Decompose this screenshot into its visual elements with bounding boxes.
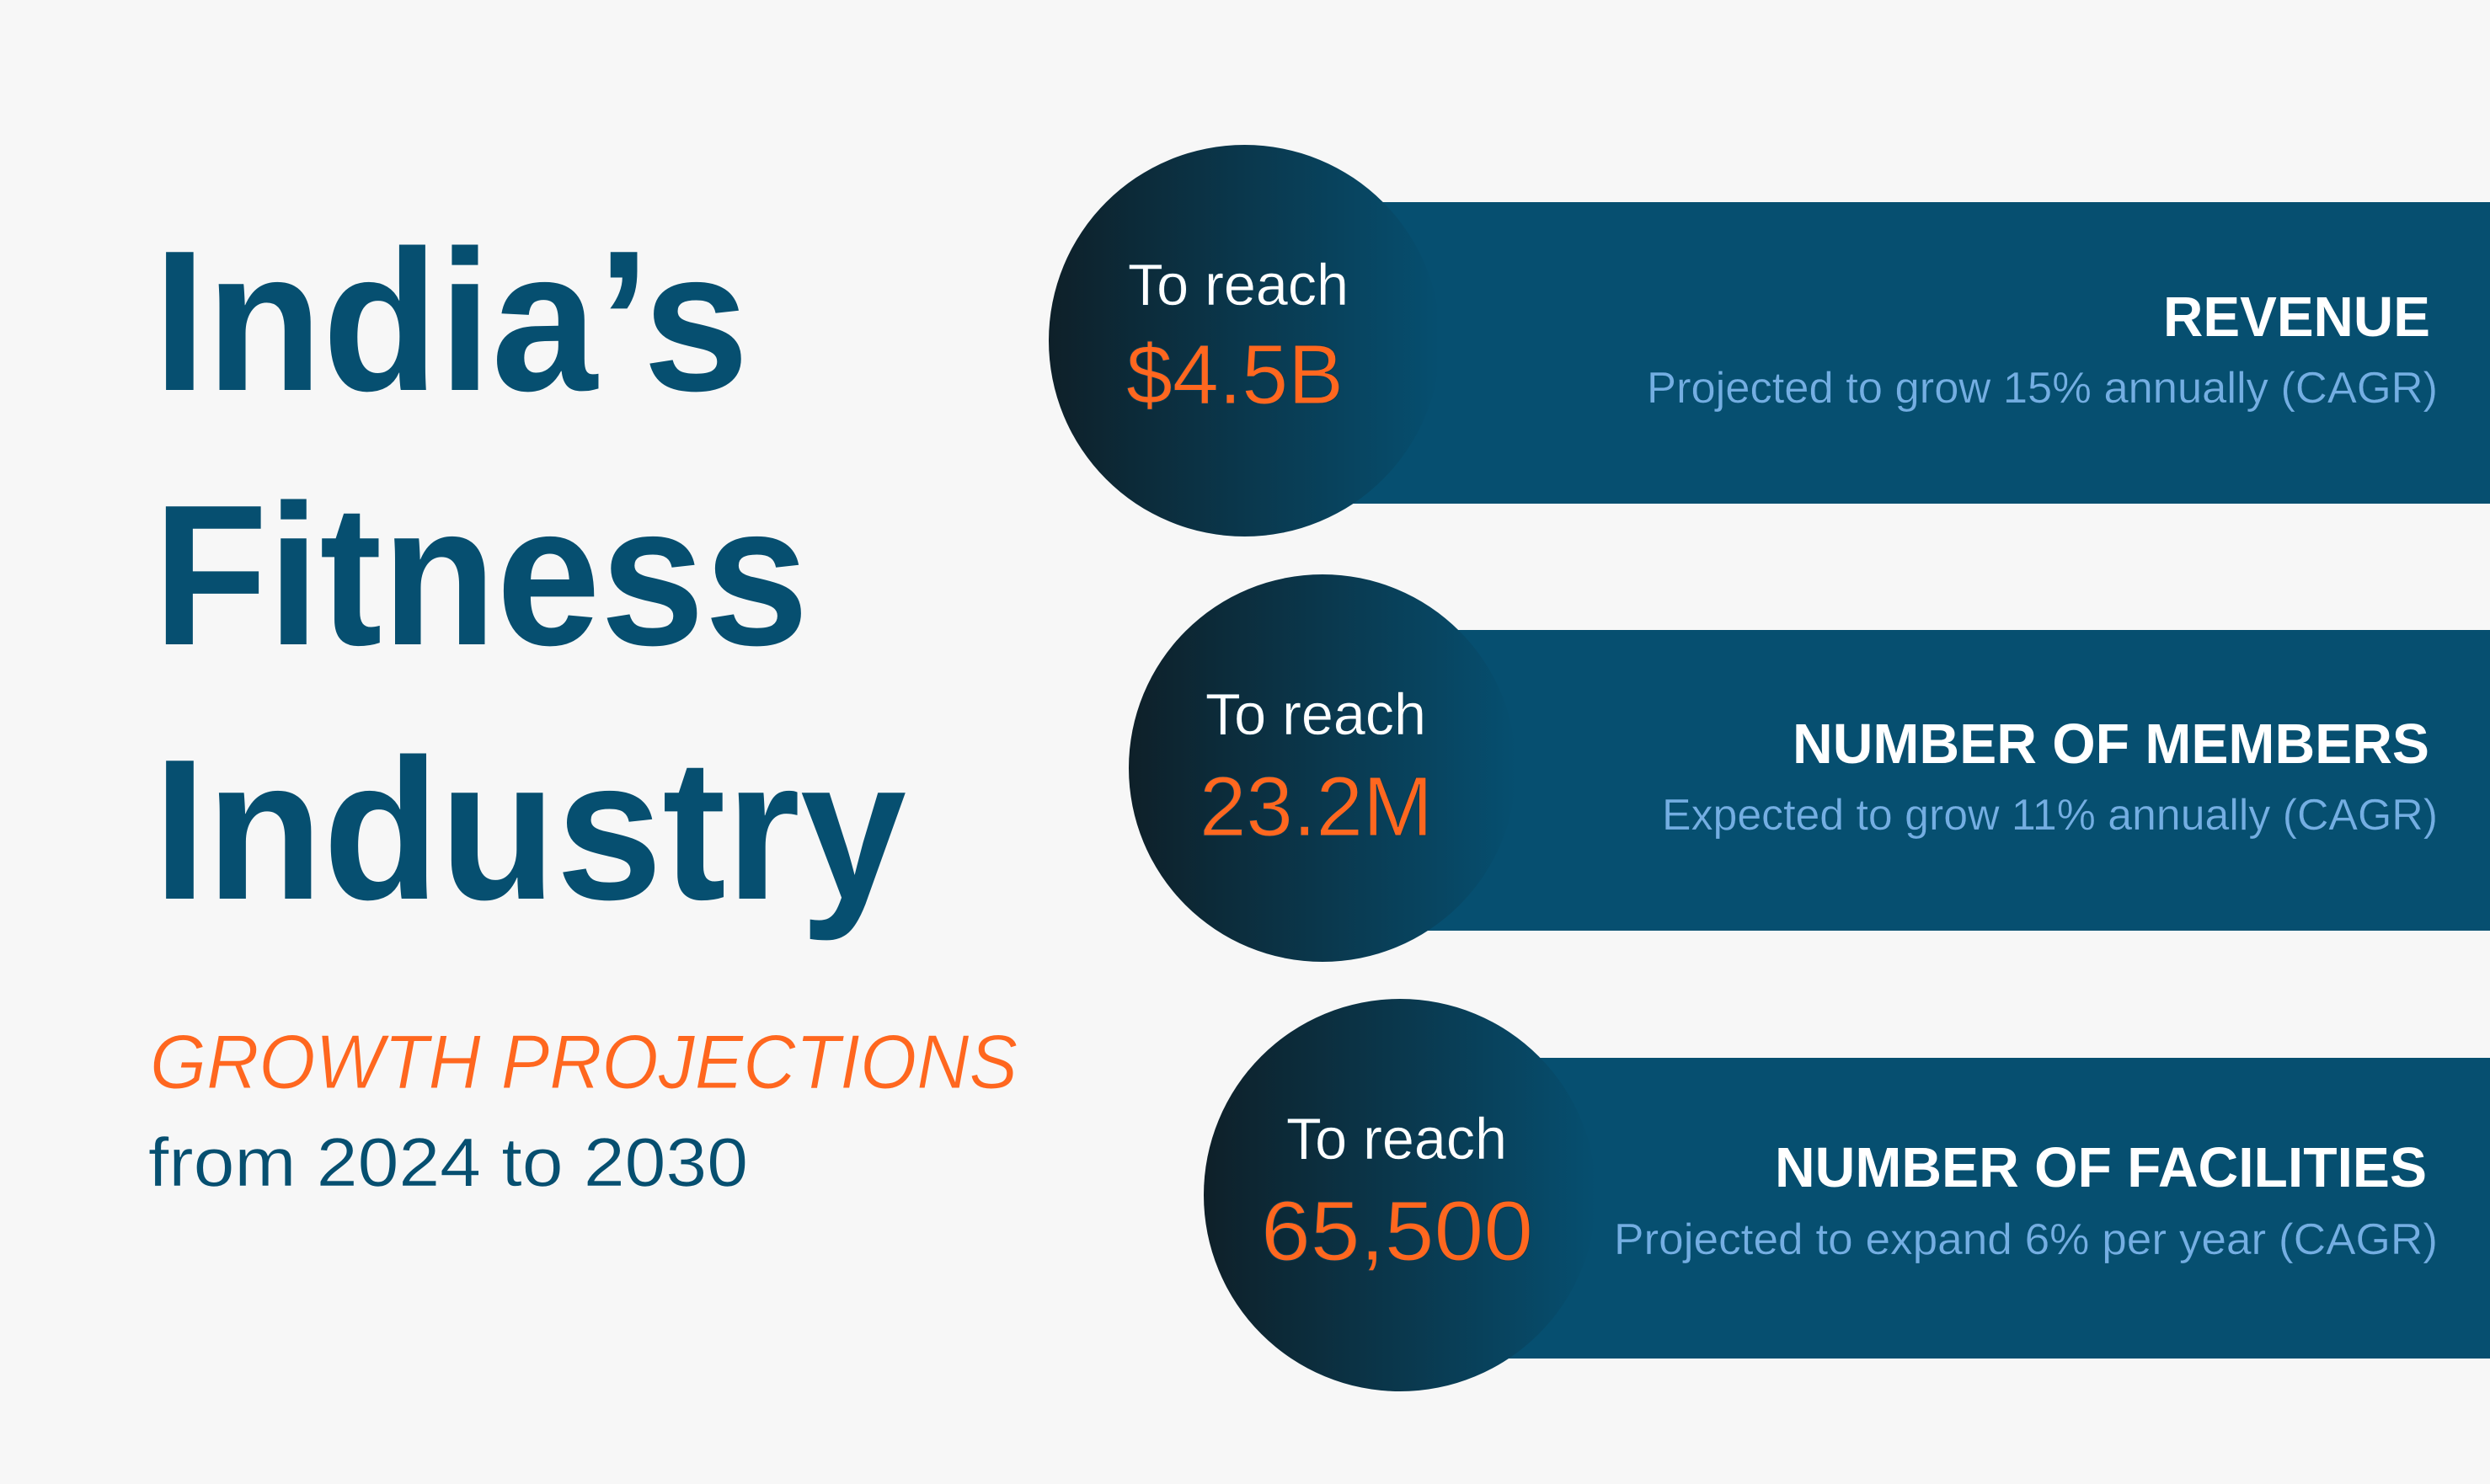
panel: members	[1129, 574, 2490, 962]
value: 65,500: 65,500	[1261, 1184, 1533, 1278]
value: 23.2M: 23.2M	[1200, 760, 1433, 854]
title: Industry	[153, 718, 906, 942]
circle: revenue	[1049, 145, 1440, 536]
heading: revenue: REVENUE	[2163, 286, 2430, 349]
value: $4.5B: $4.5B	[1126, 328, 1344, 422]
panel: revenue	[1049, 145, 2490, 536]
heading: facilities: NUMBER OF FACILITIES	[1775, 1136, 2427, 1199]
banner: facilities	[1400, 1058, 2490, 1359]
title: India’s	[153, 210, 749, 433]
label: to reach: To reach	[1128, 252, 1349, 318]
title	[153, 210, 906, 942]
panel: facilities	[1204, 999, 2490, 1391]
circle: facilities	[1204, 999, 1596, 1391]
subtitle: growth projections: GROWTH PROJECTIONS	[150, 1020, 1018, 1105]
description: facilities: Projected to expand 6% per year (CAGR)	[1614, 1215, 2438, 1264]
description: members: Expected to grow 11% annually (CAGR)	[1662, 791, 2438, 840]
description: revenue: Projected to grow 15% annually (CAGR)	[1647, 364, 2438, 413]
banner: revenue	[1245, 202, 2490, 504]
subtitle: date range: from 2024 to 2030	[148, 1124, 748, 1201]
label: to reach: To reach	[1286, 1106, 1507, 1172]
heading: members: NUMBER OF MEMBERS	[1793, 713, 2429, 776]
banner: members	[1322, 630, 2490, 931]
title: Fitness	[153, 464, 809, 687]
label: to reach: To reach	[1205, 681, 1426, 747]
circle: members	[1129, 574, 1516, 962]
